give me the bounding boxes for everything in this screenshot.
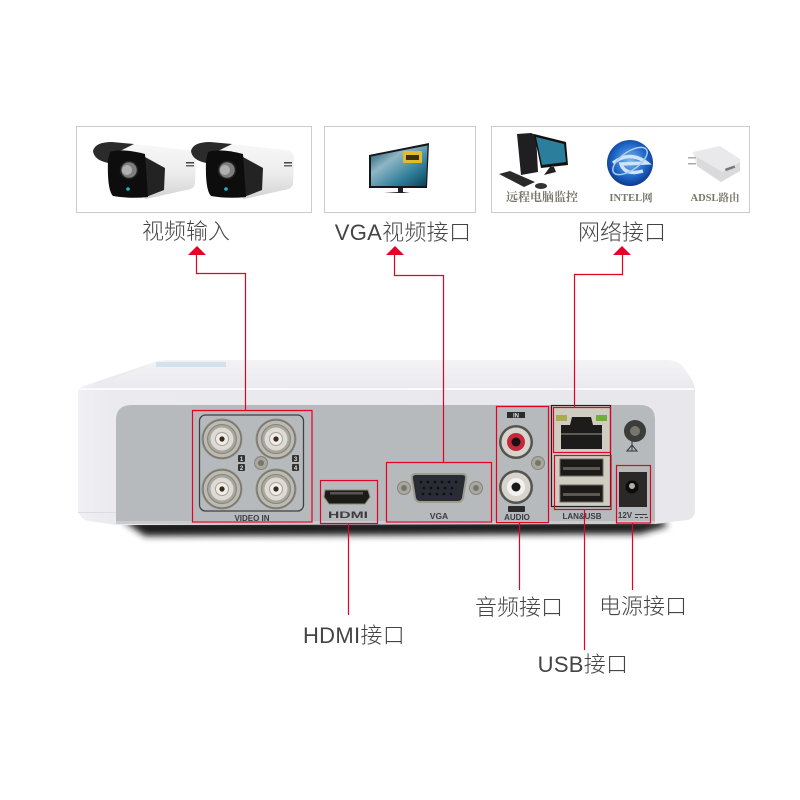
VGA port — [398, 474, 482, 521]
panel: VGA monitor — [324, 126, 476, 212]
icon: ADSL router — [688, 146, 740, 182]
audio ports: IN — [513, 414, 519, 420]
line: USB — [584, 510, 586, 650]
HDMI port — [324, 490, 370, 520]
arrow: video input — [188, 246, 246, 410]
video in connectors — [200, 415, 304, 523]
label: HDMI port: HDMI接口 — [303, 623, 405, 648]
video in connectors: 3 — [294, 457, 298, 463]
audio ports: AUDIO — [504, 513, 530, 522]
HDMI port: HDMI — [328, 510, 368, 520]
icon: internet globe — [607, 140, 653, 186]
line: HDMI — [348, 524, 350, 615]
icon: right camera — [191, 142, 294, 199]
panel: network — [492, 126, 750, 212]
ground screw — [624, 420, 646, 451]
DVR device — [78, 360, 695, 536]
arrow: VGA — [386, 246, 444, 462]
audio ports — [499, 412, 544, 522]
label: audio port: 音频接口 — [475, 595, 563, 620]
icon: left camera — [93, 142, 196, 199]
heading: video input: 视频输入 — [142, 219, 230, 244]
video in connectors: VIDEO IN — [234, 514, 270, 523]
caption: remote PC monitoring: 远程电脑监控 — [506, 189, 578, 204]
line: power — [632, 523, 634, 590]
heading: network port: 网络接口 — [578, 220, 666, 245]
caption: internet: INTEL网 — [609, 191, 653, 204]
heading: VGA video port: VGA视频接口 — [335, 220, 471, 245]
VGA port: VGA — [430, 511, 448, 521]
arrow: network — [574, 246, 631, 407]
LAN and USB ports: LAN&USB — [562, 512, 602, 521]
label: USB port: USB接口 — [538, 652, 628, 677]
video in connectors: 1 — [240, 457, 244, 463]
power jack — [618, 472, 648, 520]
power jack: 12V — [618, 511, 633, 520]
icon: desktop computer — [499, 133, 568, 189]
line: audio — [518, 523, 520, 590]
icon: monitor — [369, 143, 429, 193]
caption: ADSL router: ADSL路由 — [690, 191, 740, 204]
video in connectors: 2 — [240, 466, 244, 472]
panel: video input cameras — [76, 126, 312, 212]
video in connectors: 4 — [294, 466, 298, 472]
label: power port: 电源接口 — [599, 594, 687, 619]
red highlight boxes — [192, 406, 650, 524]
LAN and USB ports — [552, 406, 610, 521]
